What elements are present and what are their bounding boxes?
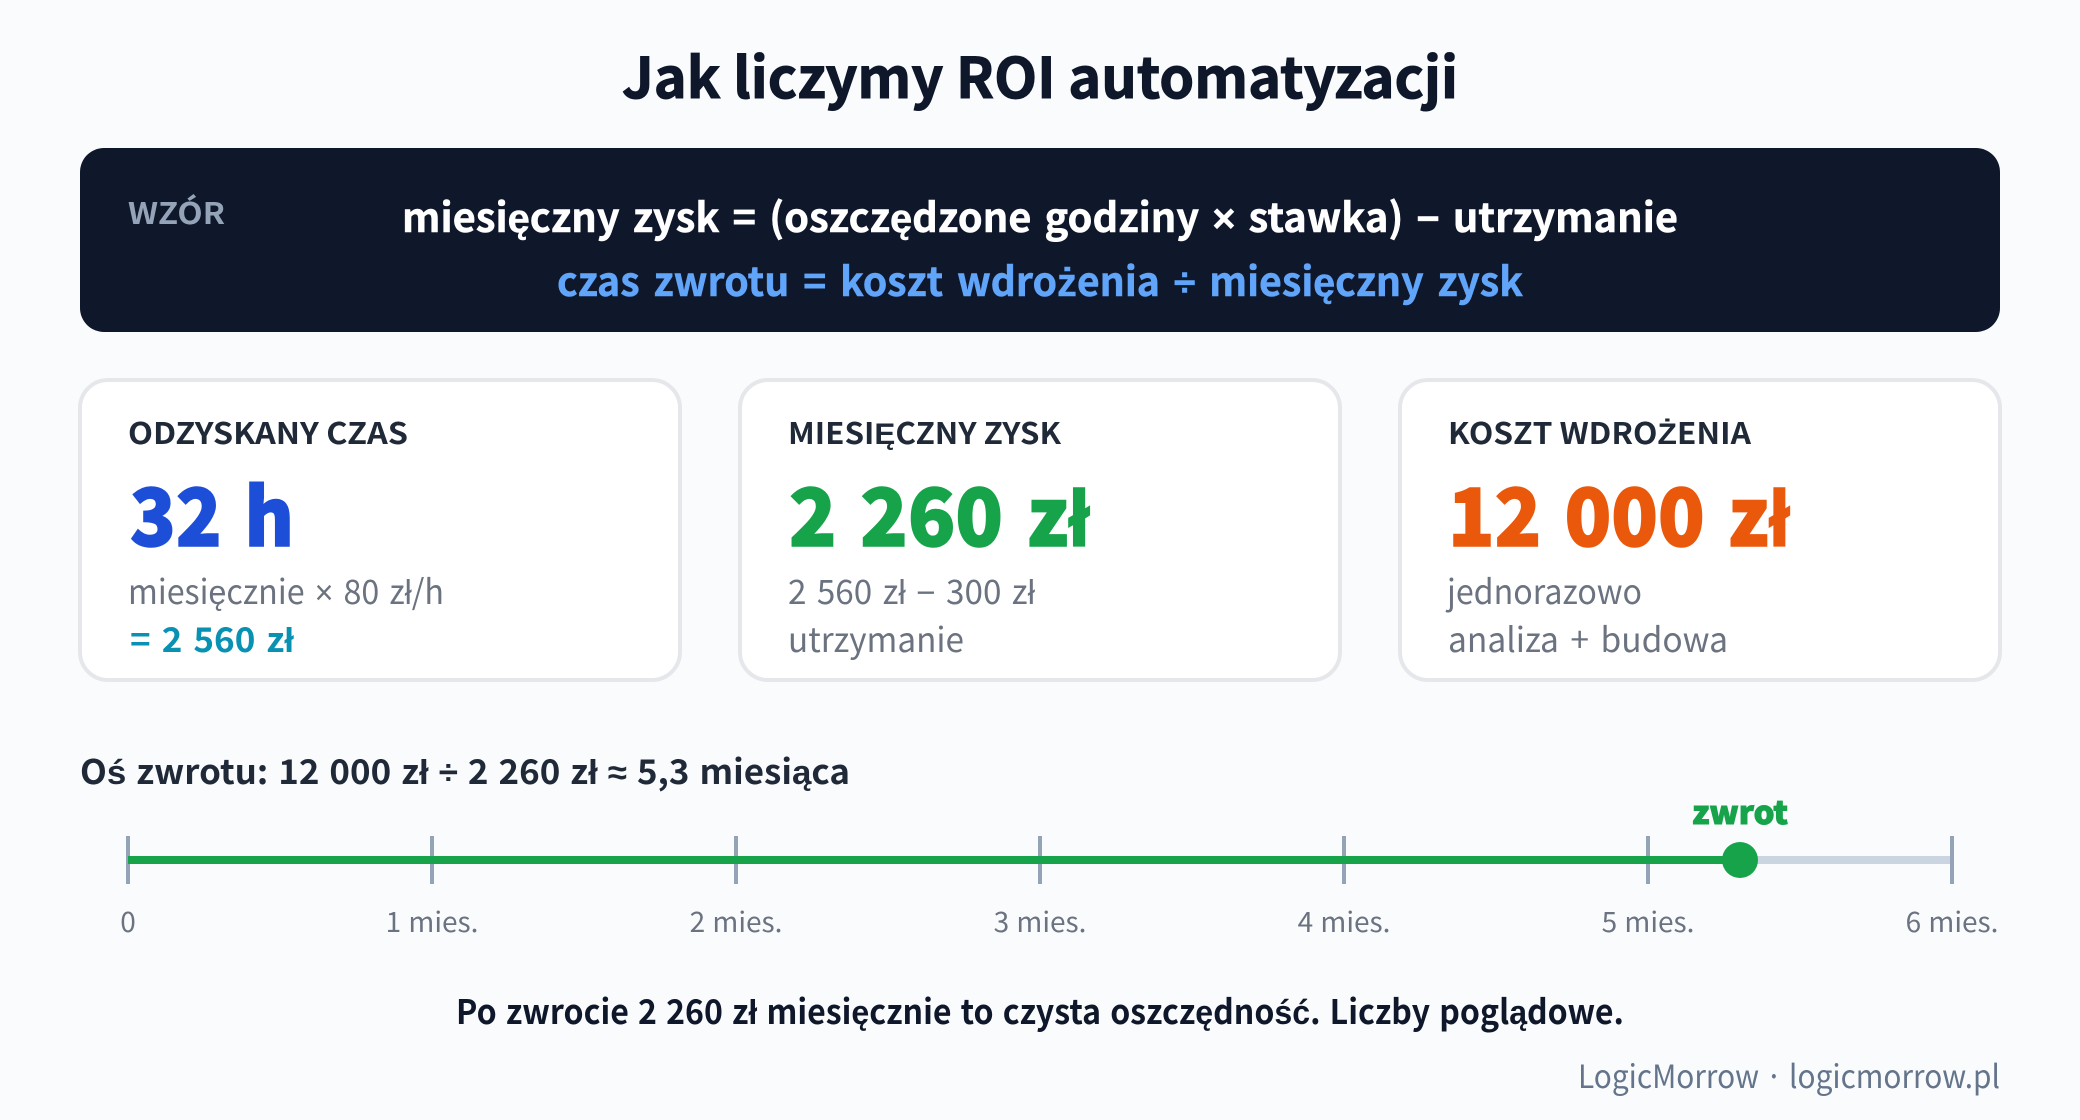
card value: 2 260 zł (789, 454, 1090, 570)
panel: recovered time (80, 380, 680, 680)
card value: 32 h (130, 454, 294, 570)
axis labels: 0 (120, 901, 136, 941)
card value: 12 000 zł (1448, 454, 1790, 570)
formula label: WZÓR (128, 189, 225, 233)
panel: monthly profit (740, 380, 1340, 680)
card detail: jednorazowo (1445, 565, 1642, 614)
formula: payback time: czas zwrotu = koszt wdrożenia ÷ miesięczny zysk (557, 250, 1523, 308)
card label: ODZYSKANY CZAS (128, 409, 408, 453)
card detail second line: utrzymanie (788, 613, 964, 662)
payback marker (1722, 842, 1758, 878)
card detail: miesięcznie × 80 zł/h (128, 565, 444, 614)
panel: formula (80, 148, 2000, 332)
axis labels: 3 mies. (994, 901, 1086, 941)
timeline heading: Oś zwrotu: 12 000 zł ÷ 2 260 zł ≈ 5,3 miesiąca (80, 745, 850, 794)
title: Jak liczymy ROI automatyzacji (622, 34, 1458, 115)
card detail second line: analiza + budowa (1448, 613, 1728, 662)
axis labels: 2 mies. (690, 901, 782, 941)
axis labels: 4 mies. (1298, 901, 1390, 941)
progress bar (128, 856, 1740, 864)
card label: MIESIĘCZNY ZYSK (788, 409, 1061, 453)
panel: implementation cost (1400, 380, 2000, 680)
formula: monthly profit: miesięczny zysk = (oszczędzone godziny × stawka) − utrzymanie (402, 186, 1678, 244)
card detail: 2 560 zł − 300 zł (788, 565, 1035, 614)
footer credit: LogicMorrow · logicmorrow.pl (1578, 1052, 2000, 1098)
takeaway note: Po zwrocie 2 260 zł miesięcznie to czysta oszczędność. Liczby poglądowe. (456, 985, 1624, 1034)
axis labels: 1 mies. (386, 901, 478, 941)
axis labels: 5 mies. (1602, 901, 1694, 941)
axis labels (120, 901, 1998, 941)
card result: = 2 560 zł (130, 613, 295, 662)
payback label: zwrot (1692, 788, 1788, 834)
chart: payback timeline (120, 788, 1998, 941)
card label: KOSZT WDRO ŻENIA (1448, 409, 1752, 453)
axis labels: 6 mies. (1906, 901, 1998, 941)
